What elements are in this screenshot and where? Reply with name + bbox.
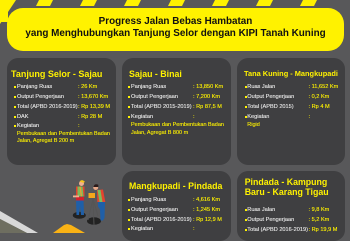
panel: Sajau - Binai: Kegiatan (131, 114, 153, 120)
panel: Mangkupadi - Pindada: Total (APBD 2016-2019) (131, 217, 192, 223)
panel: Tana Kuning - Mangkupadi: Kegiatan (247, 114, 269, 120)
heading: Tanjung Selor - Sajau (11, 69, 102, 79)
panel: Sajau - Binai: Pembukaan dan Pembentukan Badan (131, 122, 224, 128)
heading: Baru - Karang Tigau (245, 187, 329, 197)
panel: Tanjung Selor - Sajau: : Rp 28 M (78, 114, 102, 120)
panel: Tana Kuning - Mangkupadi: Ruas Jalan (247, 84, 275, 90)
panel: Sajau - Binai: : Rp 87,5 M (193, 104, 222, 110)
panel: Pindada - Kampung Baru - Karang Tigau: Ruas Jalan (247, 207, 275, 213)
panel: Mangkupadi - Pindada: : Rp 12,9 M (193, 217, 222, 223)
heading (245, 176, 329, 197)
title banner: Progress Jalan Bebas Hambatan (99, 16, 252, 26)
panel: Tana Kuning - Mangkupadi: : Rp 4 M (308, 104, 330, 110)
panel: Tana Kuning - Mangkupadi (237, 58, 345, 165)
heading: Mangkupadi - Pindada (129, 181, 222, 191)
panel: Mangkupadi - Pindada: : 4,616 Km (193, 197, 220, 203)
panel: Tana Kuning - Mangkupadi: : 0,2 Km (308, 94, 329, 100)
road with yellow marking (0, 211, 85, 233)
panel: Tana Kuning - Mangkupadi: : (308, 114, 310, 120)
panel: Tanjung Selor - Sajau: Output Pengerjaan (17, 94, 64, 100)
panel: Sajau - Binai: Total (APBD 2015-2019) (131, 104, 192, 110)
heading: Pindada - Kampung (245, 176, 327, 186)
panel: Mangkupadi - Pindada: Output Pengerjaan (131, 207, 178, 213)
panel: Tanjung Selor - Sajau: Total (APBD 2016-2019) (17, 104, 78, 110)
panel: Pindada - Kampung Baru - Karang Tigau (237, 171, 345, 241)
panel: Pindada - Kampung Baru - Karang Tigau: : Rp 19,9 M (308, 227, 337, 233)
panel: Tanjung Selor - Sajau: : (78, 123, 80, 129)
heading: Tana Kuning - Mangkupadi (244, 69, 338, 78)
panel: Sajau - Binai: : 13,850 Km (193, 84, 223, 90)
panel: Tanjung Selor - Sajau: : Rp 13,39 M (78, 104, 110, 110)
title banner: yang Menghubungkan Tanjung Selor dengan KIPI Tanah Kuning (25, 28, 326, 38)
panel: Tana Kuning - Mangkupadi: Output Pengerjaan (247, 94, 294, 100)
panel: Tana Kuning - Mangkupadi: : 11,652 Km (308, 84, 338, 90)
panel: Tanjung Selor - Sajau: DAK (17, 114, 29, 120)
panel: Tanjung Selor - Sajau: Pembukaan dan Pembentukan Badan (17, 130, 110, 136)
panel: Tanjung Selor - Sajau: : 26 Km (78, 84, 97, 90)
panel: Mangkupadi - Pindada: : (193, 226, 195, 232)
panel: Pindada - Kampung Baru - Karang Tigau: Total (APBD 2016-2019) (247, 227, 308, 233)
panel: Mangkupadi - Pindada: Kegiatan (131, 226, 153, 232)
panel: Tana Kuning - Mangkupadi: Rigid (247, 122, 260, 128)
panel: Tanjung Selor - Sajau: Kegiatan (17, 123, 39, 129)
panel: Tana Kuning - Mangkupadi: Total (APBD 2015) (247, 104, 294, 110)
panel: Mangkupadi - Pindada (122, 171, 231, 241)
panel: Sajau - Binai (122, 58, 231, 165)
panel: Sajau - Binai: : 7,200 Km (193, 94, 220, 100)
illustration: surveyors (72, 180, 106, 225)
panel: Tanjung Selor - Sajau (7, 58, 116, 165)
panel: Sajau - Binai: Jalan, Agregat B 800 m (131, 130, 188, 136)
panel: Tanjung Selor - Sajau: Jalan, Agregat B 200 m (17, 138, 74, 144)
panel: Tanjung Selor - Sajau: Panjang Ruas (17, 84, 52, 90)
panel: Mangkupadi - Pindada: : 1,245 Km (193, 207, 220, 213)
panel: Sajau - Binai: : (193, 114, 195, 120)
panel: Pindada - Kampung Baru - Karang Tigau: Output Pengerjaan (247, 217, 294, 223)
panel: Pindada - Kampung Baru - Karang Tigau: : 5,2 Km (308, 217, 329, 223)
title banner (7, 8, 344, 51)
panel: Mangkupadi - Pindada: Panjang Ruas (131, 197, 166, 203)
panel: Sajau - Binai: Panjang Ruas (131, 84, 166, 90)
panel: Pindada - Kampung Baru - Karang Tigau: : 9,8 Km (308, 207, 329, 213)
panel: Tanjung Selor - Sajau: : 13,670 Km (78, 94, 108, 100)
heading: Sajau - Binai (129, 69, 182, 79)
panel: Sajau - Binai: Output Pengerjaan (131, 94, 178, 100)
